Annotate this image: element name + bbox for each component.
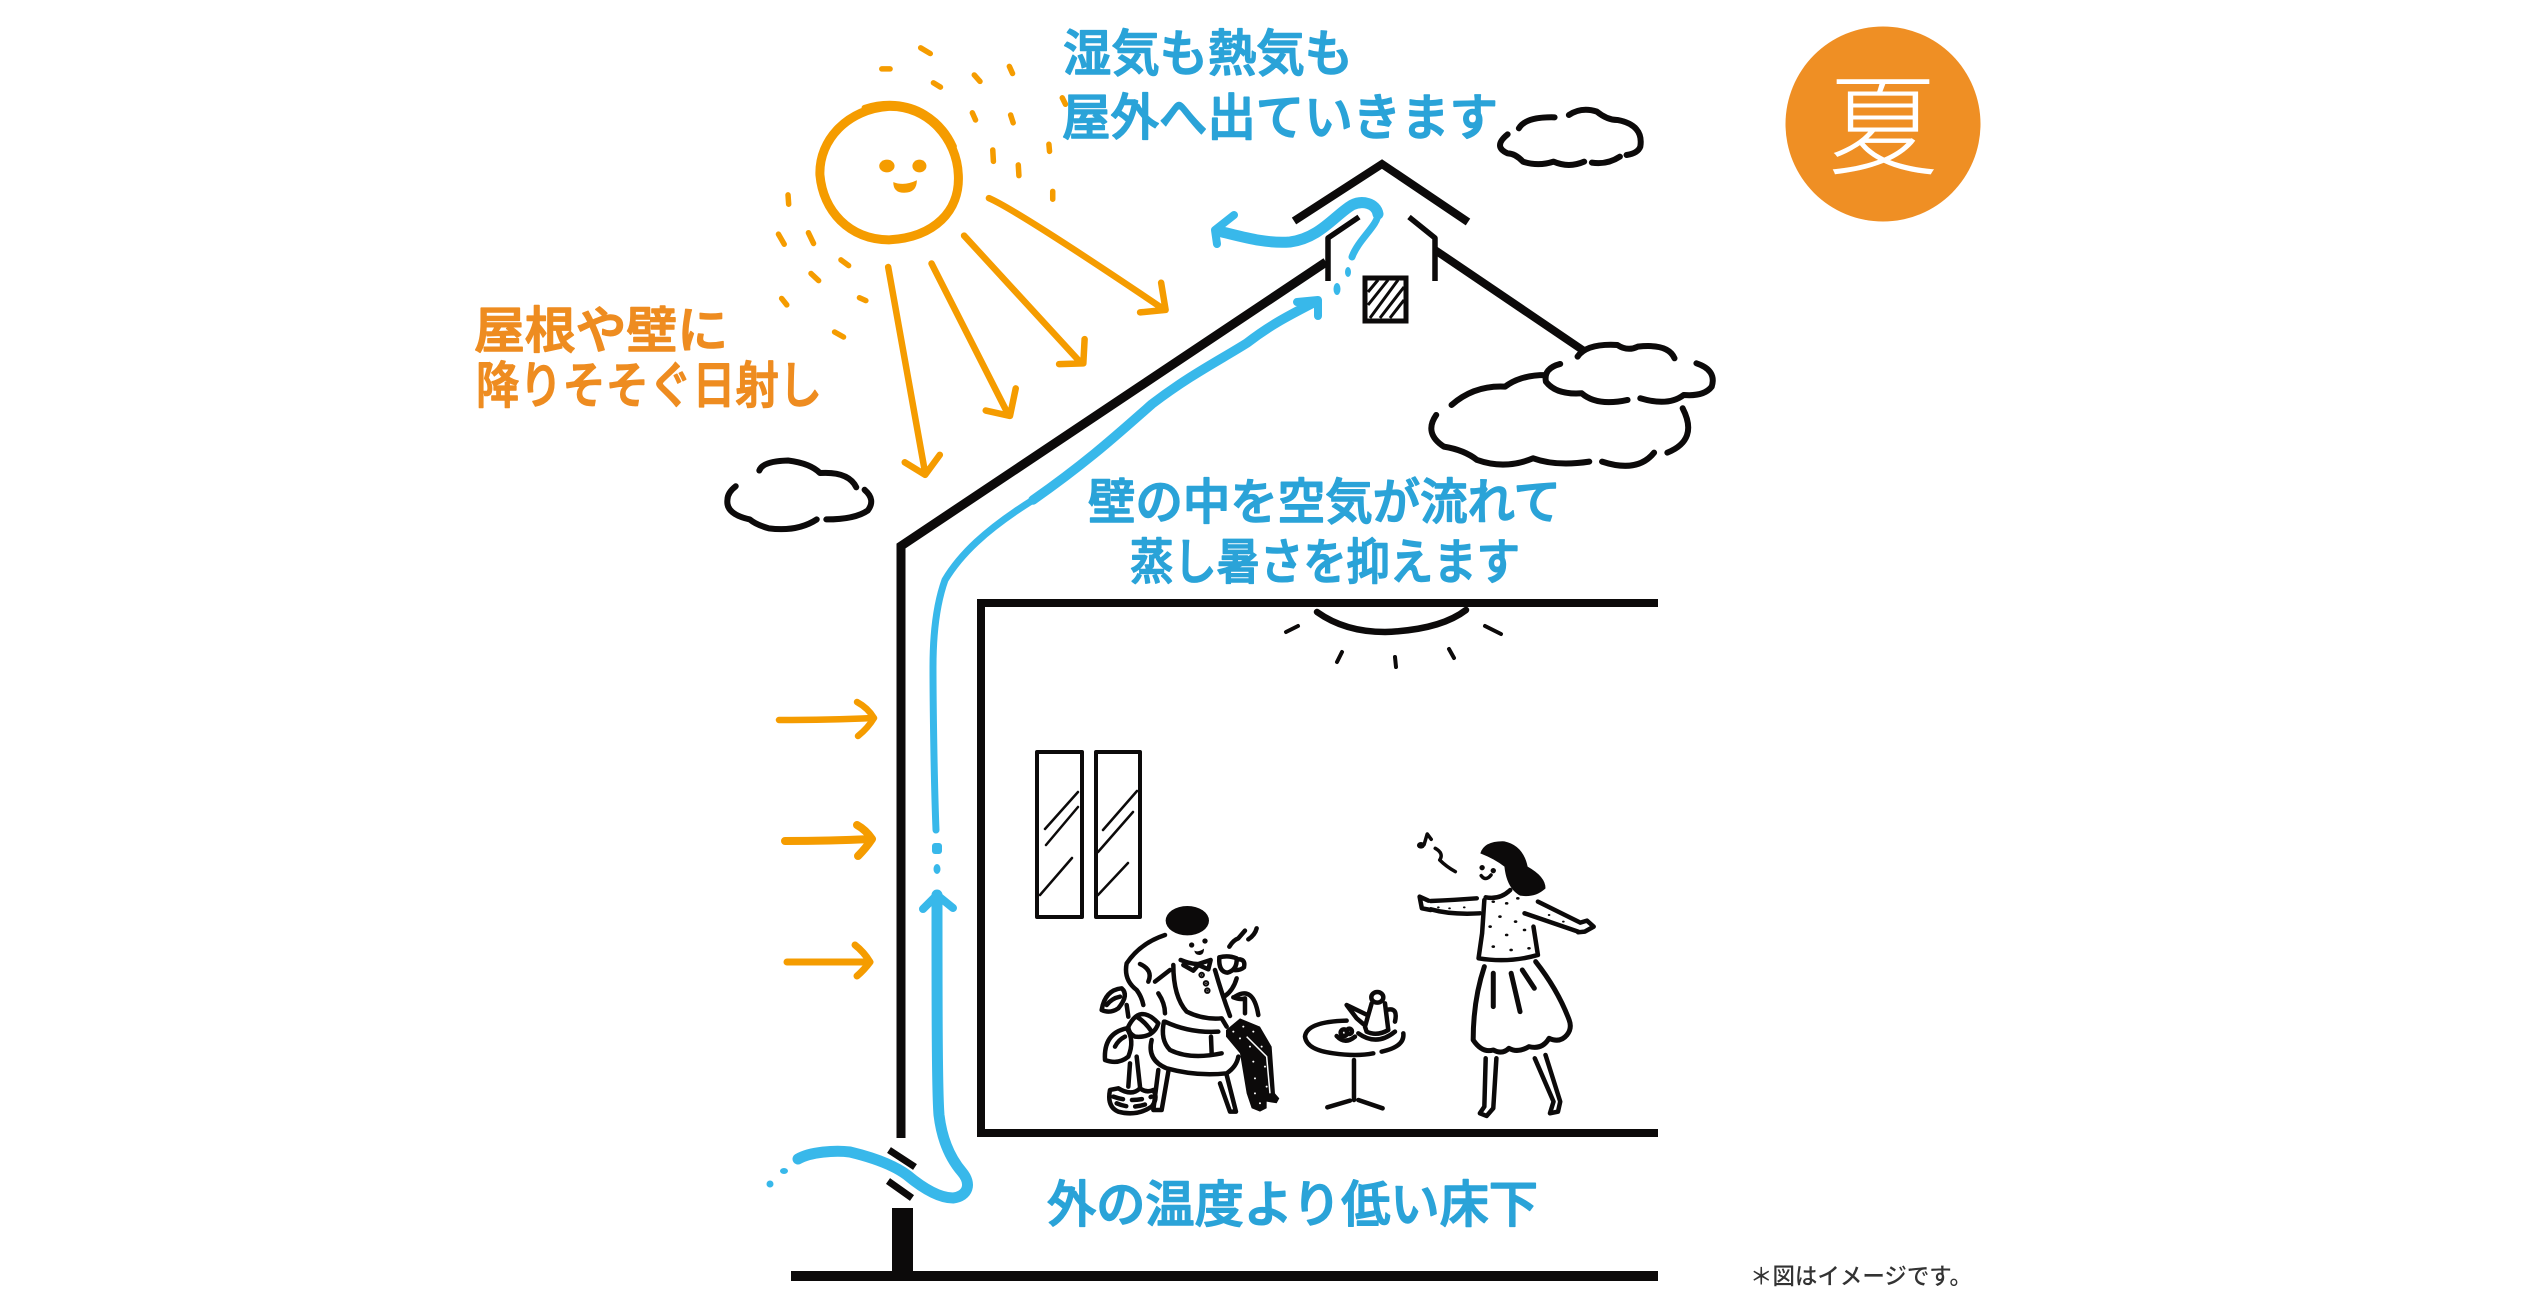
- woman dancing: [1417, 834, 1594, 1116]
- text: solar radiation label: 屋根や壁に: [474, 303, 728, 359]
- airflow: arrowhead roof: [1297, 300, 1318, 316]
- roof and outer wall: [901, 262, 1326, 1138]
- note: ＊図はイメージです。: [1750, 1263, 1972, 1289]
- airflow: along roof thicker: [1033, 302, 1315, 500]
- text: solar radiation label: [474, 303, 822, 414]
- music note: [1417, 834, 1455, 872]
- man sitting in armchair with plant: [1102, 906, 1279, 1113]
- man head: [1166, 906, 1209, 955]
- man torso and bowtie: [1173, 960, 1237, 1027]
- legs: [1480, 1055, 1560, 1116]
- text: airflow label: 蒸し暑さを抑えます: [1130, 536, 1520, 590]
- airflow: exhaust arrowhead: [1215, 215, 1234, 244]
- potted plant: [1102, 988, 1158, 1113]
- window right: [1096, 752, 1140, 917]
- sun face: [820, 104, 958, 240]
- man trousers: [1226, 1018, 1279, 1112]
- interior room walls: [981, 603, 1658, 1133]
- windows: [1037, 752, 1140, 917]
- wall vent slats: [888, 1150, 915, 1198]
- text: airflow label: 壁の中を空気が流れて: [1088, 476, 1561, 530]
- airflow: arrowhead up: [923, 895, 953, 909]
- chimney vent: [1328, 217, 1435, 281]
- cloud: right pair: [1431, 345, 1713, 466]
- airflow: vent dots: [1334, 267, 1351, 295]
- season badge: 夏: [1828, 67, 1938, 190]
- house structure: [791, 164, 1658, 1281]
- heading: summer top text: [1062, 26, 1498, 146]
- coffee cup with steam: [1219, 928, 1257, 973]
- airflow: through foundation and up: [798, 895, 968, 1198]
- clouds: [727, 110, 1713, 529]
- airflow: along wall and roof: [933, 500, 1033, 830]
- armchair: [1126, 935, 1258, 1112]
- skirt: [1473, 962, 1570, 1052]
- foundation post: [892, 1208, 913, 1276]
- vent grille: [1365, 278, 1406, 321]
- text: solar radiation label: 降りそそぐ日射し: [476, 358, 822, 414]
- orange heat arrows on wall: [779, 702, 874, 976]
- season badge: [1786, 26, 1980, 222]
- side table with teapot: [1305, 992, 1403, 1108]
- airflow: intake dots: [766, 1168, 788, 1188]
- airflow: mid dots: [932, 843, 942, 874]
- right roof: [1435, 250, 1584, 351]
- roof ridge cap: [1294, 164, 1468, 222]
- sun sparkle dashes: [778, 48, 1065, 337]
- cloud: left: [727, 461, 871, 529]
- blue airflow path: [766, 203, 1378, 1198]
- airflow: exhaust thin part: [1352, 214, 1378, 257]
- heading: summer top text: 屋外へ出ていきます: [1062, 90, 1498, 146]
- airflow: exhaust out of ridge: [1218, 203, 1378, 242]
- hair and face: [1479, 841, 1546, 896]
- icon: sun with rays: [778, 48, 1166, 475]
- window left: [1037, 752, 1082, 917]
- text: airflow label: [1088, 476, 1561, 590]
- sun rays arrows: [888, 198, 1166, 475]
- heading: summer top text: 湿気も熱気も: [1063, 26, 1353, 82]
- ceiling light: [1286, 610, 1501, 667]
- ground line: [791, 1271, 1658, 1281]
- text: under floor label: 外の温度より低い床下: [1047, 1177, 1538, 1233]
- cloud: top right: [1500, 110, 1641, 165]
- blouse: [1420, 890, 1594, 960]
